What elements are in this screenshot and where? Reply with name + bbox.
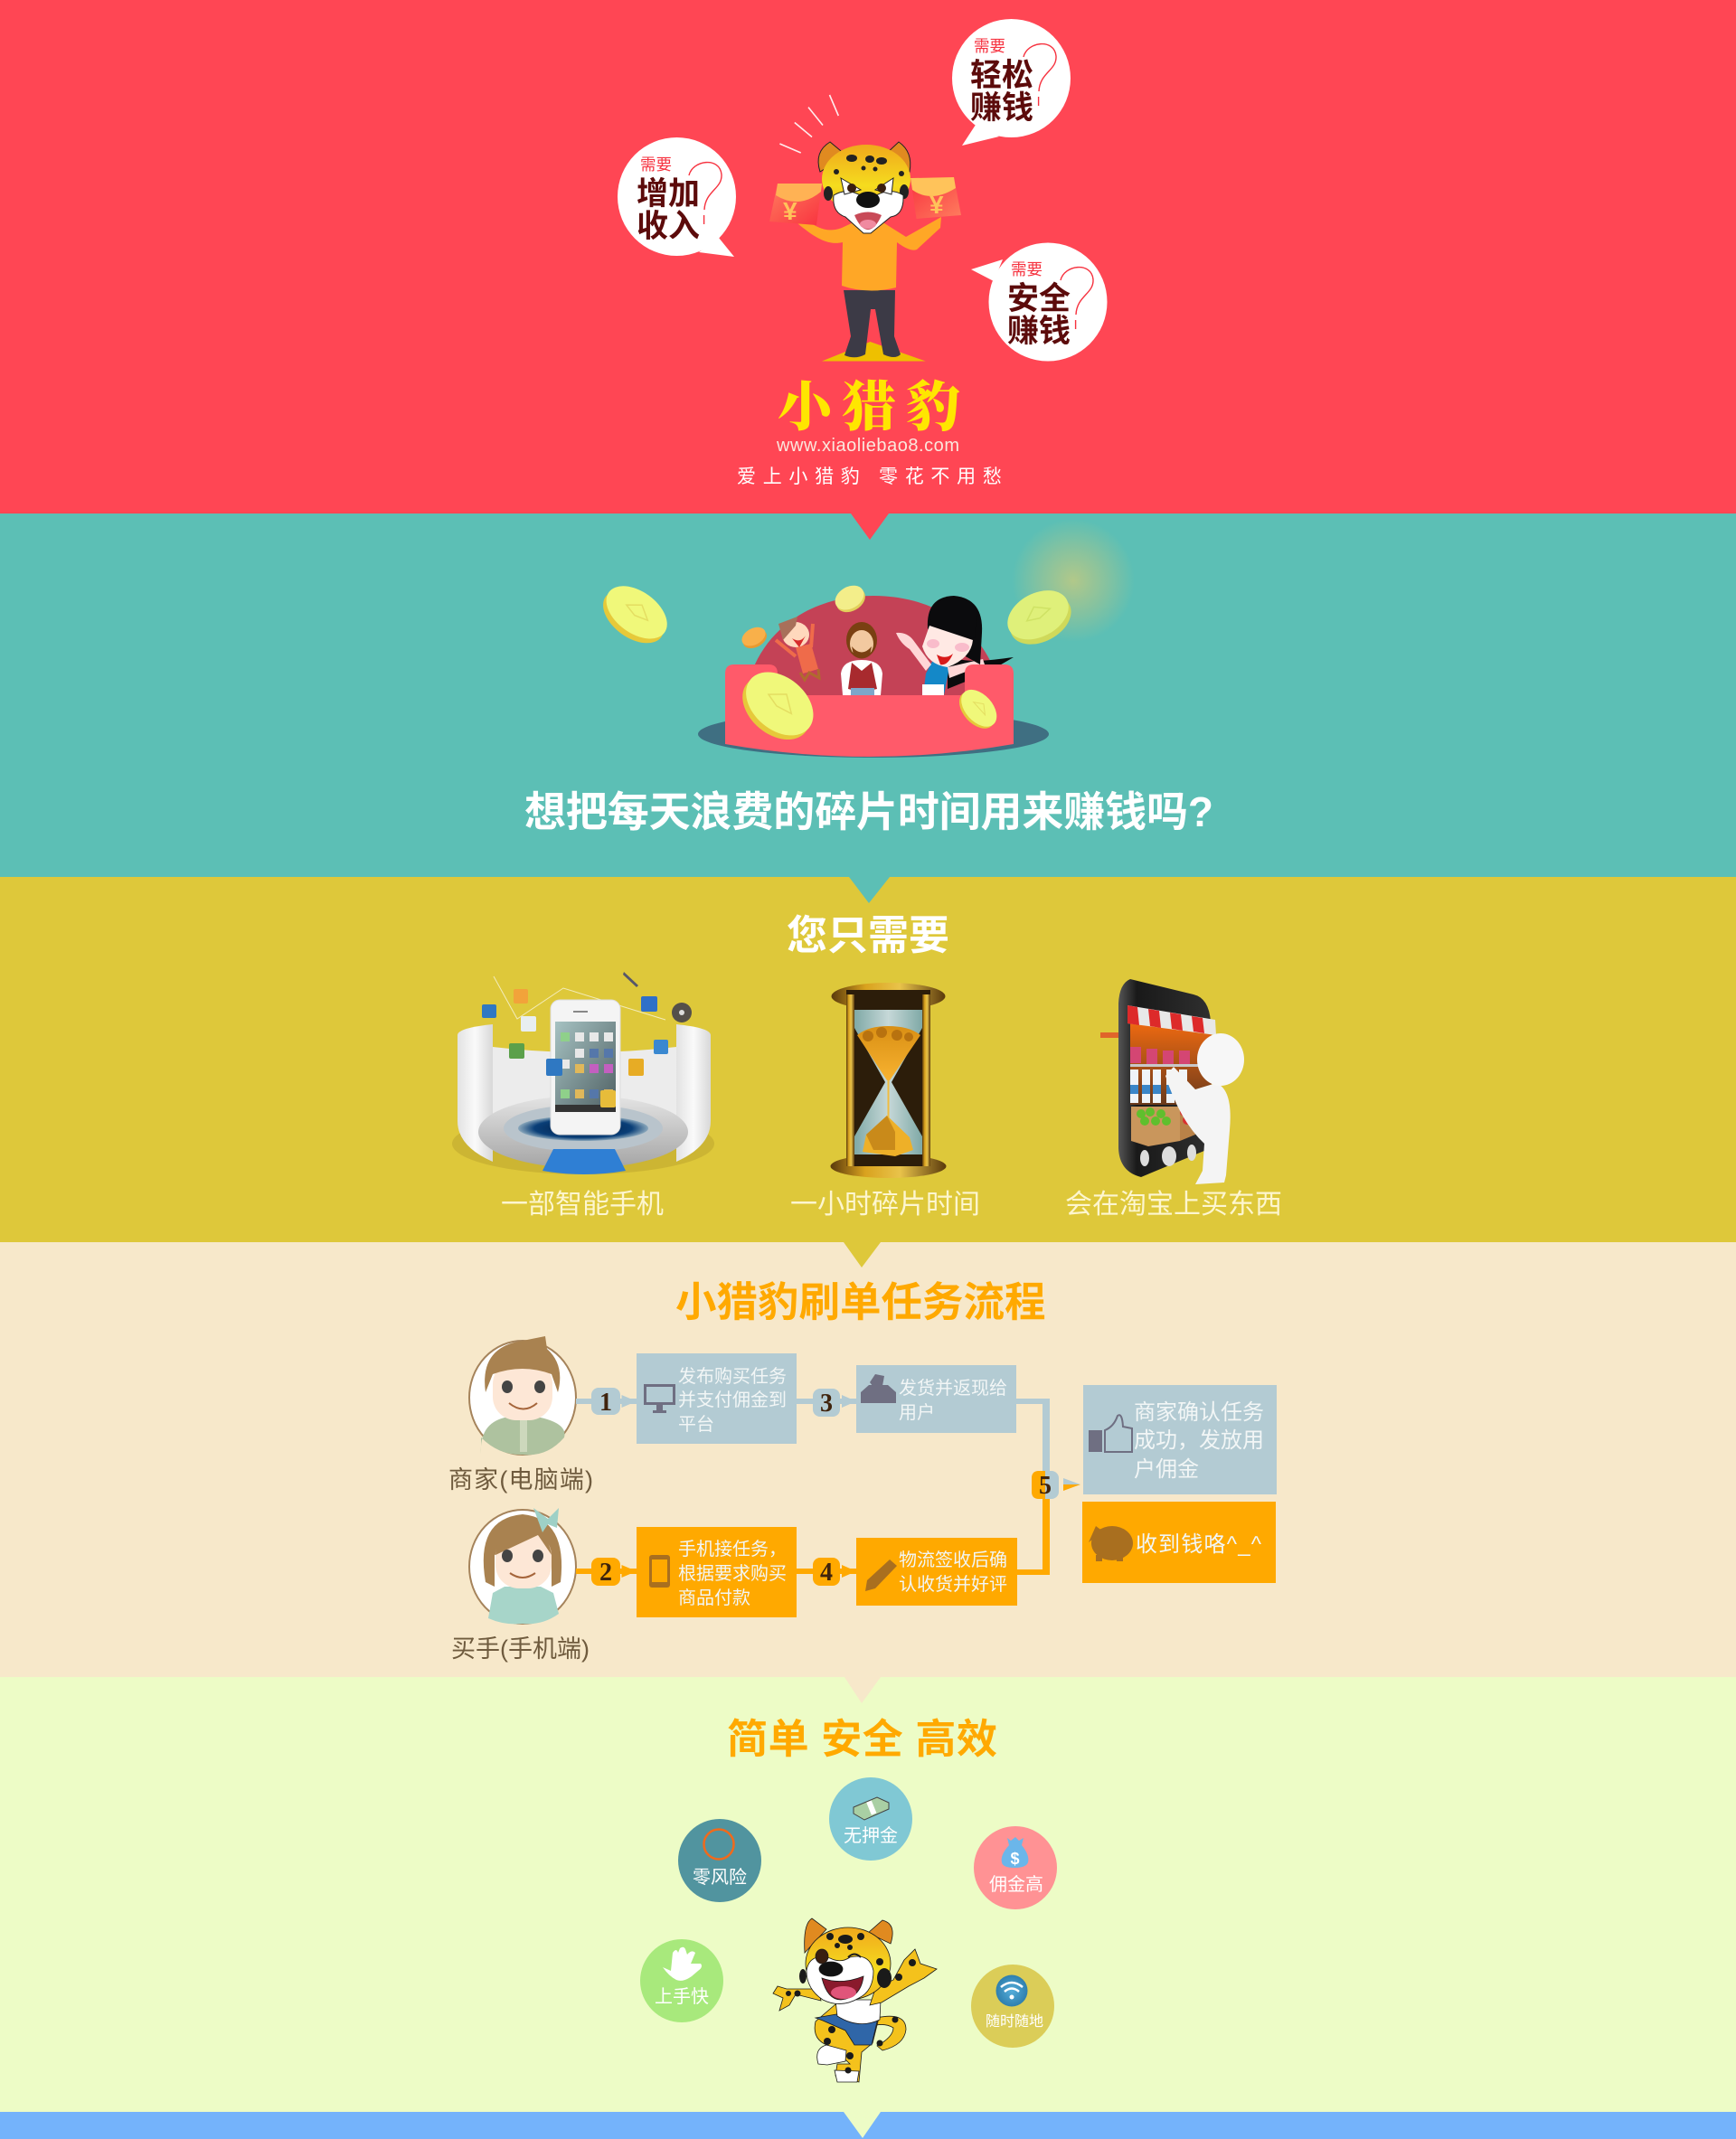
pointer: cream <box>844 1677 881 1703</box>
badge: zero risk: 零风险 <box>693 1867 747 1888</box>
mascot: leopard man with red envelopes: ¥ <box>783 197 797 225</box>
connectors: blue path <box>576 1399 1050 1471</box>
phone <box>551 1000 620 1135</box>
step 4 badge <box>813 1558 840 1587</box>
step 2 badge: 2 <box>599 1559 612 1587</box>
logo title: 小猎豹 <box>778 364 970 442</box>
pointer: green <box>844 2112 881 2138</box>
box: buyer takes task: 手机接任务， <box>678 1539 787 1559</box>
box: confirm receipt: 认收货并好评 <box>899 1574 1007 1595</box>
heading: simple safe efficient: 简单 安全 高效 <box>727 1716 997 1762</box>
website url: www.xiaoliebao8.com <box>776 436 959 456</box>
arrow: step 2 <box>622 1565 637 1578</box>
pointer: teal <box>849 877 890 903</box>
badge: no deposit <box>829 1777 912 1861</box>
label: merchant: 商家(电脑端) <box>448 1466 593 1494</box>
heading: task flow: 小猎豹刷单任务流程 <box>675 1279 1046 1325</box>
caption: one hour: 一小时碎片时间 <box>790 1190 980 1220</box>
badge: high commission <box>974 1826 1057 1909</box>
caption: shop on taobao: 会在淘宝上买东西 <box>1065 1190 1282 1220</box>
floating network lines <box>494 976 665 1020</box>
badge: anytime anywhere: 随时随地 <box>986 2013 1043 2030</box>
step 1 badge <box>591 1388 620 1417</box>
icon: piggy bank <box>1089 1526 1133 1561</box>
badge: easy to start: 上手快 <box>655 1986 709 2007</box>
panel: red hero <box>0 0 1736 514</box>
box: receive money: 收到钱咯^_^ <box>1136 1532 1262 1557</box>
icon: white hand <box>663 1947 702 1981</box>
speech bubble: more income: 增加 <box>637 176 700 212</box>
panel: green benefits <box>0 1677 1736 2112</box>
connectors: orange path <box>576 1499 1050 1575</box>
mascot: leopard man with red envelopes <box>769 142 961 362</box>
coin: large left <box>731 659 826 752</box>
person: jumping girl <box>776 617 819 680</box>
box: merchant confirms: 商家确认任务 <box>1134 1400 1264 1425</box>
avatar: buyer <box>469 1508 576 1624</box>
arrow: step 5 <box>1063 1478 1080 1491</box>
speech bubble: safe money: 赚钱 <box>1007 314 1071 349</box>
speech bubble: easy money <box>952 19 1071 146</box>
pointer: red <box>851 514 889 540</box>
box: merchant posts task <box>637 1353 797 1444</box>
box: ship and rebate: 用户 <box>899 1402 935 1423</box>
label: buyer: 买手(手机端) <box>451 1635 590 1663</box>
box: merchant confirms <box>1083 1385 1277 1494</box>
box: confirm receipt <box>856 1538 1017 1606</box>
badge: high commission: 佣金高 <box>989 1874 1043 1895</box>
sun glow <box>1012 519 1135 642</box>
panel: cream process flow <box>0 1242 1736 1677</box>
coin: top small <box>831 580 870 617</box>
motion lines <box>779 95 838 153</box>
icon: pencil <box>865 1559 897 1591</box>
arrow: step 3 <box>842 1395 856 1408</box>
person: bearded man <box>841 622 882 695</box>
icon: zero ring <box>703 1830 734 1859</box>
badge: zero risk <box>678 1819 761 1902</box>
illustration: smartphone on platform <box>452 972 714 1174</box>
step 4 badge: 4 <box>820 1559 833 1587</box>
step 5 badge <box>1032 1471 1059 1500</box>
speech bubble: more income: 收入 <box>637 209 700 244</box>
coin: upper left <box>593 575 676 654</box>
box: receive money <box>1082 1502 1276 1583</box>
coin: small right <box>952 683 1004 735</box>
illustration: shop in phone with figure <box>1100 979 1244 1184</box>
icon: money bag: $ <box>1010 1850 1020 1868</box>
coin: upper right <box>999 580 1080 655</box>
box: ship and rebate: 发货并返现给 <box>899 1378 1007 1399</box>
box: buyer takes task: 根据要求购买 <box>678 1563 787 1584</box>
speech bubble: easy money: 轻松 <box>970 58 1033 93</box>
icon: wifi <box>996 1974 1027 2007</box>
speech bubble: easy money: 需要 <box>974 37 1005 55</box>
icon: mobile phone <box>649 1555 670 1588</box>
speech bubble: safe money <box>971 242 1107 362</box>
floating app icons <box>482 972 692 1107</box>
icon: monitor <box>644 1384 675 1413</box>
arrow: step 4 <box>842 1565 856 1578</box>
speech bubble: safe money: 需要 <box>1011 260 1043 278</box>
badge: easy to start <box>640 1939 723 2022</box>
panel: teal question <box>0 514 1736 877</box>
coin: orange small <box>739 624 770 652</box>
avatar: merchant <box>469 1336 576 1455</box>
pointer: yellow <box>844 1242 881 1267</box>
icon: cash stack <box>854 1797 889 1820</box>
step 5 badge: 5 <box>1039 1472 1052 1500</box>
step 3 badge: 3 <box>820 1390 833 1418</box>
person: woman in blue <box>896 596 1014 695</box>
box: merchant posts task: 发布购买任务 <box>678 1366 787 1387</box>
speech bubble: more income: 需要 <box>640 155 672 174</box>
badge: anytime anywhere <box>971 1965 1054 2048</box>
arrow: step 1 <box>622 1395 637 1408</box>
box: ship and rebate <box>856 1365 1016 1433</box>
box: confirm receipt: 物流签收后确 <box>899 1550 1007 1570</box>
speech bubble: more income <box>618 137 736 257</box>
caption: smartphone: 一部智能手机 <box>501 1190 664 1220</box>
step 2 badge <box>591 1558 620 1587</box>
step 1 badge: 1 <box>599 1389 612 1417</box>
panel: yellow requirements <box>0 877 1736 1242</box>
illustration: couch with people and coins <box>593 575 1080 758</box>
step 3 badge <box>813 1389 840 1418</box>
box: merchant confirms: 成功，发放用 <box>1134 1428 1264 1453</box>
mascot: leopard man with red envelopes: ¥ <box>929 191 944 219</box>
box: buyer takes task <box>637 1527 797 1617</box>
speech bubble: easy money: 赚钱 <box>970 90 1033 126</box>
slogan: 爱上小猎豹 零花不用愁 <box>737 466 1009 487</box>
box: merchant posts task: 平台 <box>678 1414 714 1435</box>
badge: no deposit: 无押金 <box>844 1825 898 1846</box>
heading: question: 想把每天浪费的碎片时间用来赚钱吗? <box>524 788 1213 835</box>
box: buyer takes task: 商品付款 <box>678 1588 750 1608</box>
speech bubble: safe money: 安全 <box>1007 281 1071 316</box>
icon: inbox <box>861 1374 896 1403</box>
illustration: hourglass <box>830 983 946 1178</box>
icon: thumbs up <box>1089 1415 1132 1452</box>
panel: blue footer <box>0 2112 1736 2139</box>
mascot: jumping leopard <box>773 1918 937 2082</box>
heading: you only need: 您只需要 <box>787 912 949 958</box>
box: merchant posts task: 并支付佣金到 <box>678 1390 787 1410</box>
box: merchant confirms: 户佣金 <box>1134 1457 1199 1482</box>
